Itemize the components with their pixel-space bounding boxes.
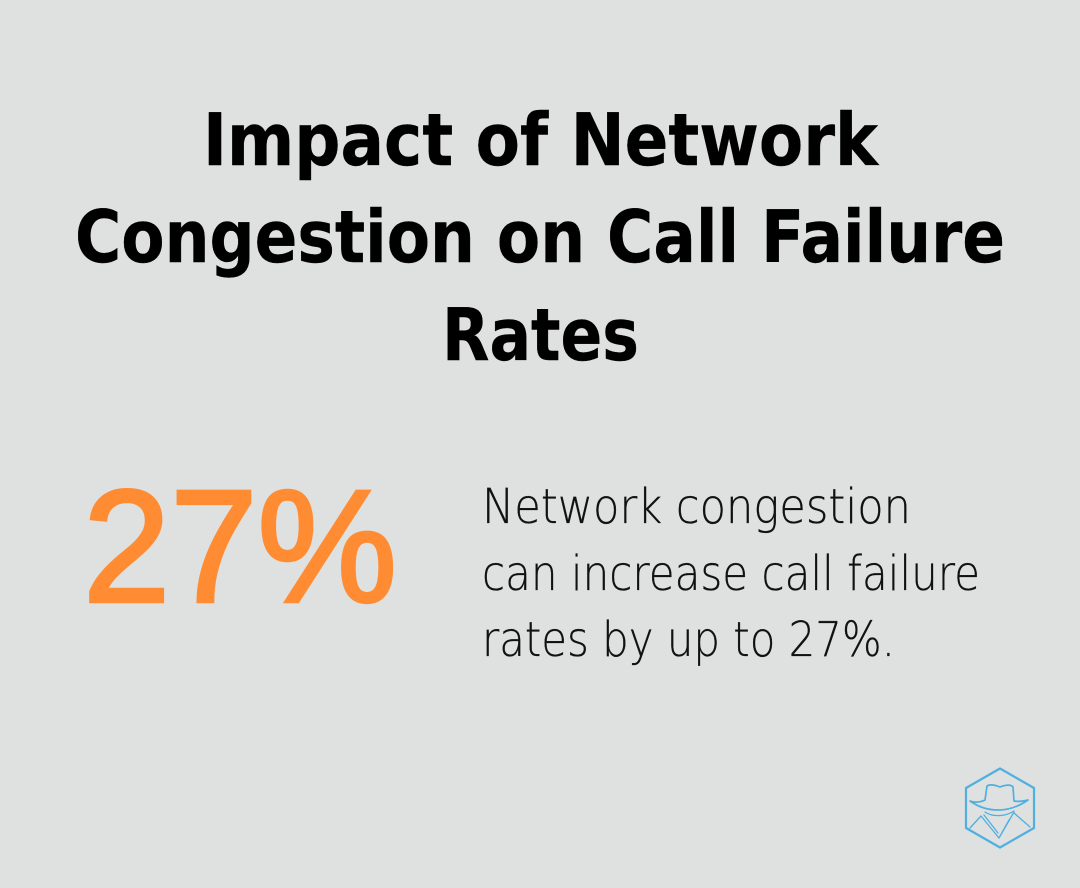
stat description: Network congestion <box>482 479 911 535</box>
big stat: 27%: 27% <box>83 456 397 636</box>
face shadow <box>985 811 1014 816</box>
hat <box>970 785 1028 810</box>
title: Rates <box>442 293 639 377</box>
title: Impact of Network <box>203 98 880 182</box>
title <box>75 98 1005 377</box>
icon: hexagon spy logo <box>966 768 1034 848</box>
coat collar <box>970 812 1030 838</box>
hexagon outline <box>966 768 1034 848</box>
stat description <box>482 479 980 668</box>
stat description: rates by up to 27%. <box>482 612 895 668</box>
stat description: can increase call failure <box>482 546 980 602</box>
